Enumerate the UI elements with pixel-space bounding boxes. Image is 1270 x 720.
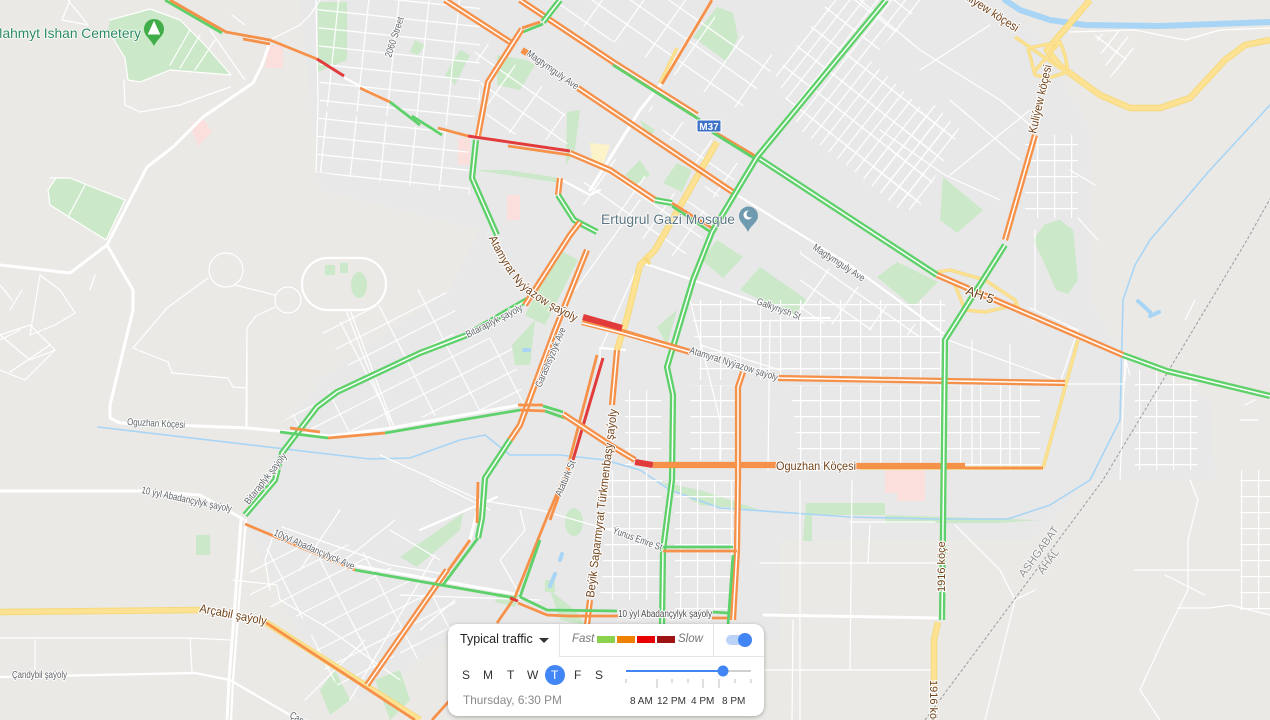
- traffic: Bitaraplyk: [245, 222, 580, 515]
- slider tick labels: 8 PM: [722, 696, 745, 707]
- traffic: north-east green artery: [662, 0, 886, 625]
- label: mosque: Ertugrul Gazi Mosque: [601, 211, 735, 227]
- traffic: Garashsyzlyk Ave: [367, 250, 587, 685]
- label: Ashgabat Ahal boundary: AHAL: [1036, 547, 1062, 577]
- park: cemetery: [108, 9, 231, 82]
- label: Ashgabat Ahal boundary: ASHGABAT: [1017, 524, 1062, 580]
- railway: [925, 190, 1270, 720]
- day selector: W: [527, 668, 538, 682]
- label: Turkmenbasy: Beýik Saparmyrat Türkmenbaşy şaýoly: [583, 408, 620, 598]
- label: Candybil: Çandybil şaýoly: [12, 670, 67, 681]
- label: AH 5: AH 5: [964, 283, 996, 307]
- day selector: S: [462, 668, 470, 682]
- panel: typical traffic controls: [448, 624, 764, 716]
- day selector: T: [507, 668, 514, 682]
- icon: mosque pin: [739, 207, 758, 232]
- label: Kuliyew kocesi: Kuliýew köçesi: [1025, 63, 1055, 135]
- label: Magtymguly Ave north: Magtymguly Ave: [524, 48, 581, 93]
- label: 10 yyl Abadancylyk west: 10 ýyl Abadançylyk şaýoly: [140, 485, 233, 515]
- label: Atamyrat Nyyazow main: Atamyrat Nyýazow şaýoly: [488, 236, 579, 324]
- highway badge M37: M37: [699, 122, 719, 133]
- label: 2060 Street: 2060 Street: [383, 15, 407, 59]
- traffic: east artery Kuliyew: [942, 135, 1035, 620]
- divider horizontal: [559, 656, 764, 657]
- day selector: [462, 665, 603, 685]
- label: 10 yyl Ave: 10ýyl Abadançylyck Ave: [272, 528, 356, 573]
- label: Oguzhan Kocesi: Oguzhan Köçesi: [776, 459, 856, 473]
- traffic: Atamyrat Nyyazow: [582, 317, 1065, 383]
- selected time: Thursday, 6:30 PM: [463, 693, 562, 707]
- traffic: north-west corridor: [165, 0, 715, 233]
- urban area: [245, 0, 1215, 700]
- traffic: Turkmenbasy: [587, 350, 617, 625]
- traffic: Ataturk St: [432, 355, 603, 720]
- slider tick labels: 4 PM: [691, 696, 714, 707]
- traffic: southern avenues: [245, 372, 743, 720]
- day selector: M: [483, 668, 493, 682]
- park: west field: [48, 178, 125, 240]
- label: Magtymguly Ave east: Magtymguly Ave: [810, 242, 867, 284]
- divider vertical right: [713, 624, 714, 656]
- slider tick labels: 8 AM: [630, 696, 653, 707]
- traffic: inner ring: [472, 0, 597, 235]
- label: Bitaraplyk north: Bitaraplyk şaýoly: [464, 303, 525, 341]
- slider tick labels: [630, 696, 745, 707]
- label: Galkynysh St: Galkynysh St: [755, 296, 802, 323]
- label: Arcabil: Arçabil şaýoly: [198, 601, 268, 628]
- label: Yunus Emre St: Ýunus Emre St: [611, 524, 664, 554]
- icon: cemetery pin: [144, 19, 164, 46]
- label: 10 yyl Abadancylyk mid: 10 ýyl Abadançylyk şaýoly: [618, 609, 712, 620]
- pink blocks: [190, 45, 925, 501]
- divider vertical left: [559, 624, 560, 656]
- legend: fast label: Fast: [572, 633, 594, 645]
- label: 1916 kocesi: 1916 köçe: [936, 541, 948, 592]
- label: Garashsyzlyk Ave: Garashsyzlyk Ave: [534, 326, 569, 389]
- label: Bitaraplyk south: Bitaraplyk şaýoly: [243, 451, 290, 507]
- legend: colour swatches: [597, 636, 675, 643]
- label: Ataturk St: Atatürk St: [554, 459, 579, 498]
- label: Oguzhan Kocesi west: Oguzhan Köçesi: [127, 417, 185, 431]
- day selector: F: [574, 668, 581, 682]
- toggle switch: [726, 633, 752, 647]
- dropdown arrow: [539, 638, 549, 643]
- traffic: Magtymguly Ave: [445, 0, 737, 195]
- district street grids: [250, 0, 1270, 700]
- day selector: T: [551, 668, 558, 682]
- day selector: S: [595, 668, 603, 682]
- slider tick labels: 12 PM: [657, 696, 686, 707]
- traffic: M37 corridor: [520, 0, 1270, 396]
- time slider: [626, 666, 752, 688]
- traffic: Oguzhan Kocesi: [563, 414, 1043, 468]
- traffic mode dropdown: Typical traffic: [460, 632, 533, 646]
- highway badge M37: [697, 120, 721, 133]
- label: Atamyrat Nyyazow small: Atamyrat Nyýazow şaýoly: [688, 345, 779, 384]
- water: canal and river: [98, 0, 1270, 586]
- legend: slow label: Slow: [678, 633, 703, 645]
- traffic: Oguzhan corridor west: [280, 405, 565, 438]
